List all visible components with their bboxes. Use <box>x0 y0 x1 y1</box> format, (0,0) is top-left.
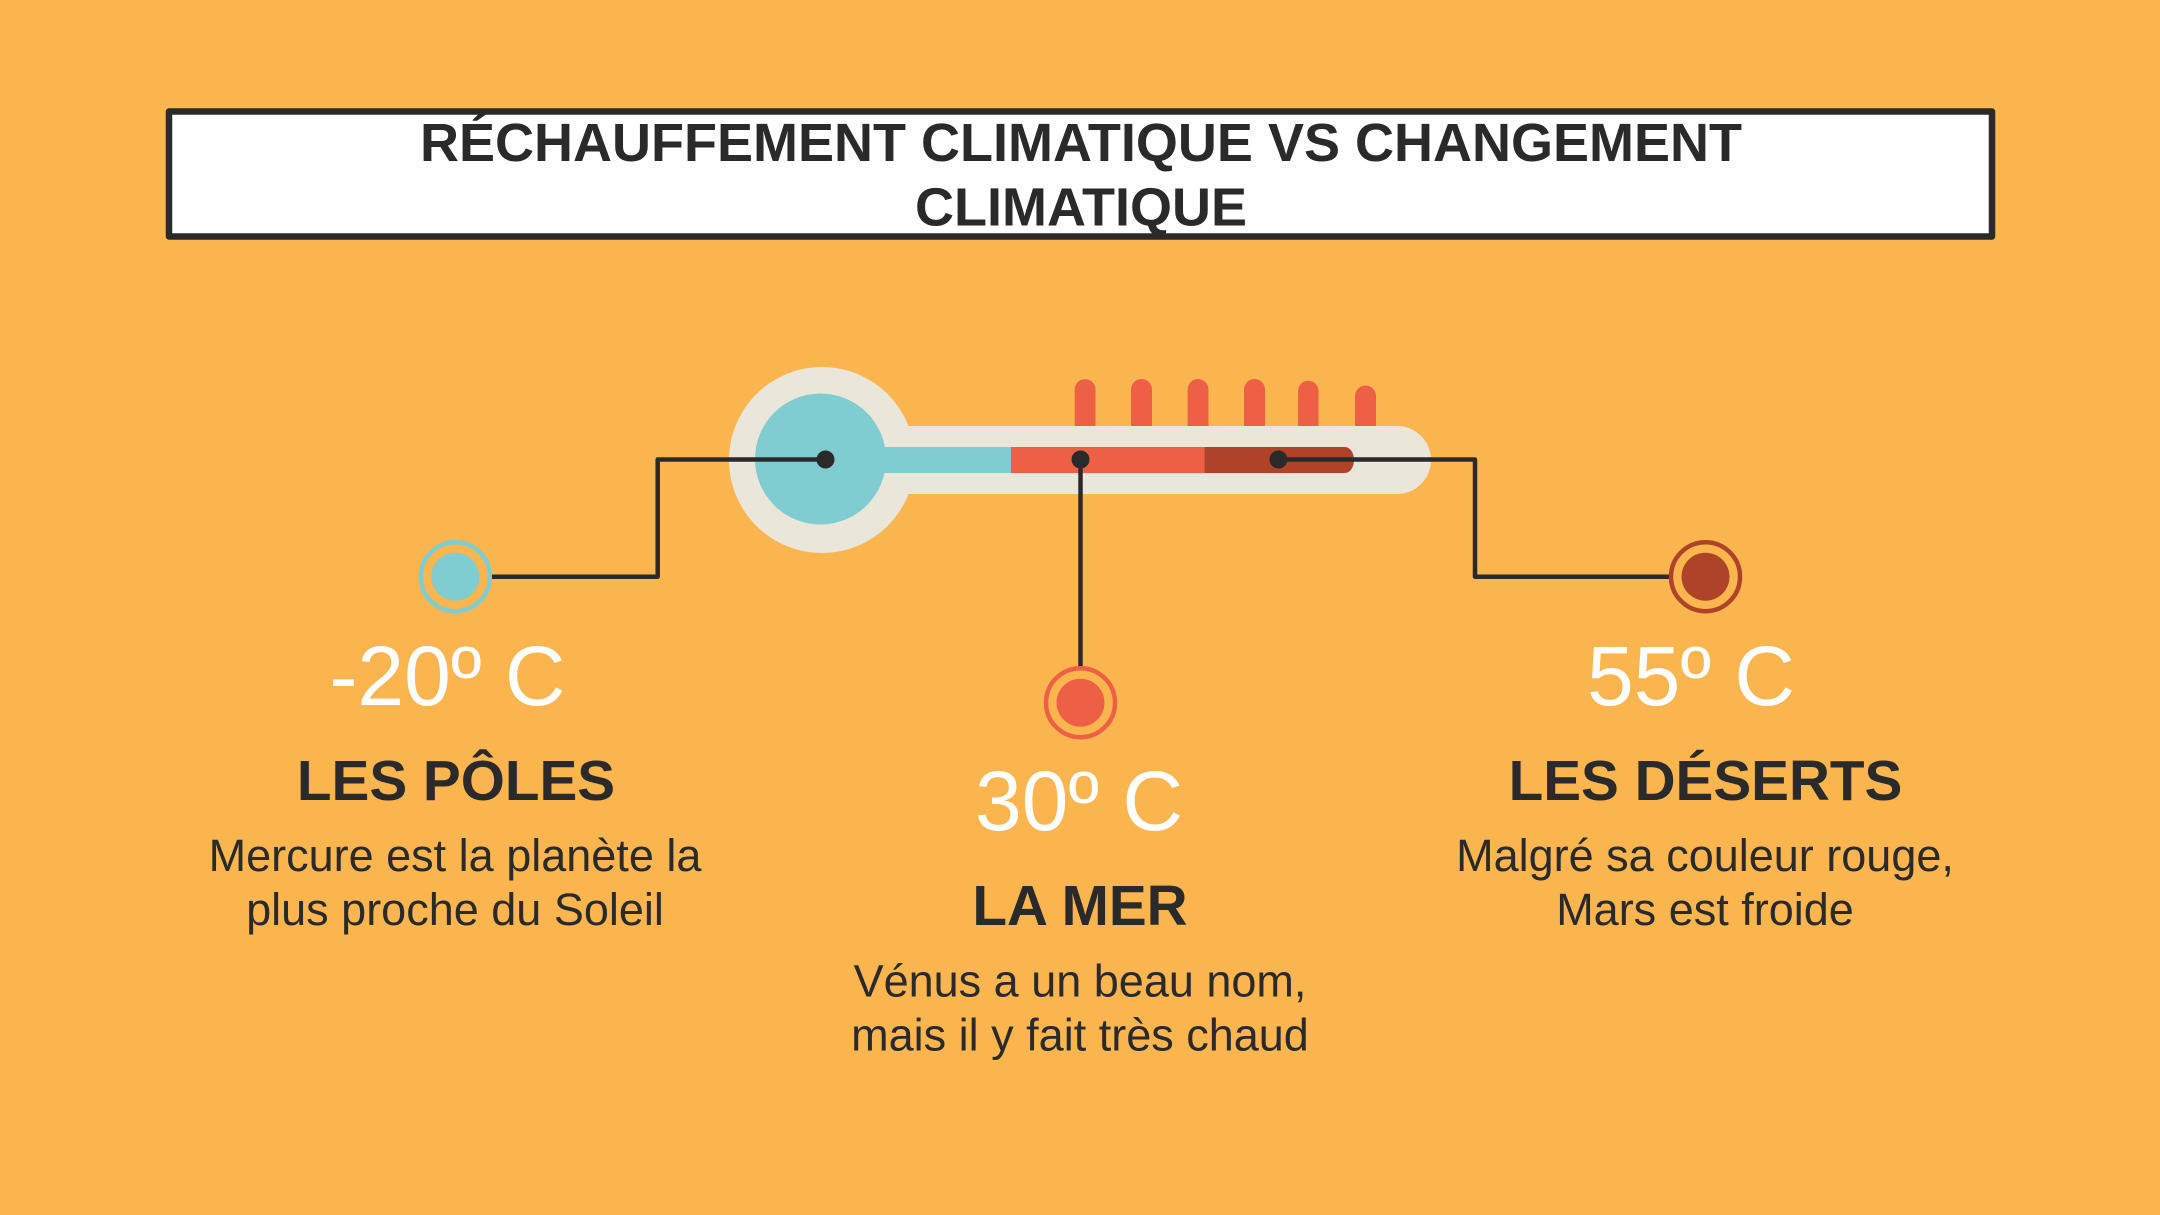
thermometer tick marks <box>1075 379 1376 430</box>
thermometer <box>729 367 1431 553</box>
heading: LES DÉSERTS <box>1509 749 1902 813</box>
temperature: -20º C <box>329 629 566 723</box>
marker: poles <box>421 542 490 611</box>
description: Mars est froide <box>1556 884 1854 935</box>
description <box>1456 830 1954 935</box>
block: les déserts <box>1456 629 1954 935</box>
thermometer casing <box>729 367 1431 553</box>
heading: LA MER <box>972 875 1188 938</box>
description: Malgré sa couleur rouge, <box>1456 830 1954 881</box>
description: plus proche du Soleil <box>246 884 664 935</box>
description: Vénus a un beau nom, <box>854 956 1306 1006</box>
connector: sea <box>1072 450 1090 667</box>
connector: deserts <box>1270 450 1670 577</box>
description: Mercure est la planète la <box>209 830 702 881</box>
block: les pôles <box>209 629 702 935</box>
mercury column <box>755 394 1354 524</box>
marker: deserts <box>1671 542 1740 611</box>
temperature: 55º C <box>1587 629 1795 723</box>
title banner <box>169 112 1992 238</box>
heading: LES PÔLES <box>297 748 615 813</box>
connector: poles <box>490 450 834 577</box>
description <box>209 830 702 935</box>
description <box>851 956 1309 1060</box>
marker: sea <box>1046 668 1115 737</box>
title banner: CLIMATIQUE <box>915 178 1247 238</box>
temperature: 30º C <box>975 754 1183 848</box>
description: mais il y fait très chaud <box>851 1010 1309 1060</box>
title banner: RÉCHAUFFEMENT CLIMATIQUE VS CHANGEMENT <box>420 113 1742 173</box>
block: la mer <box>851 754 1309 1060</box>
